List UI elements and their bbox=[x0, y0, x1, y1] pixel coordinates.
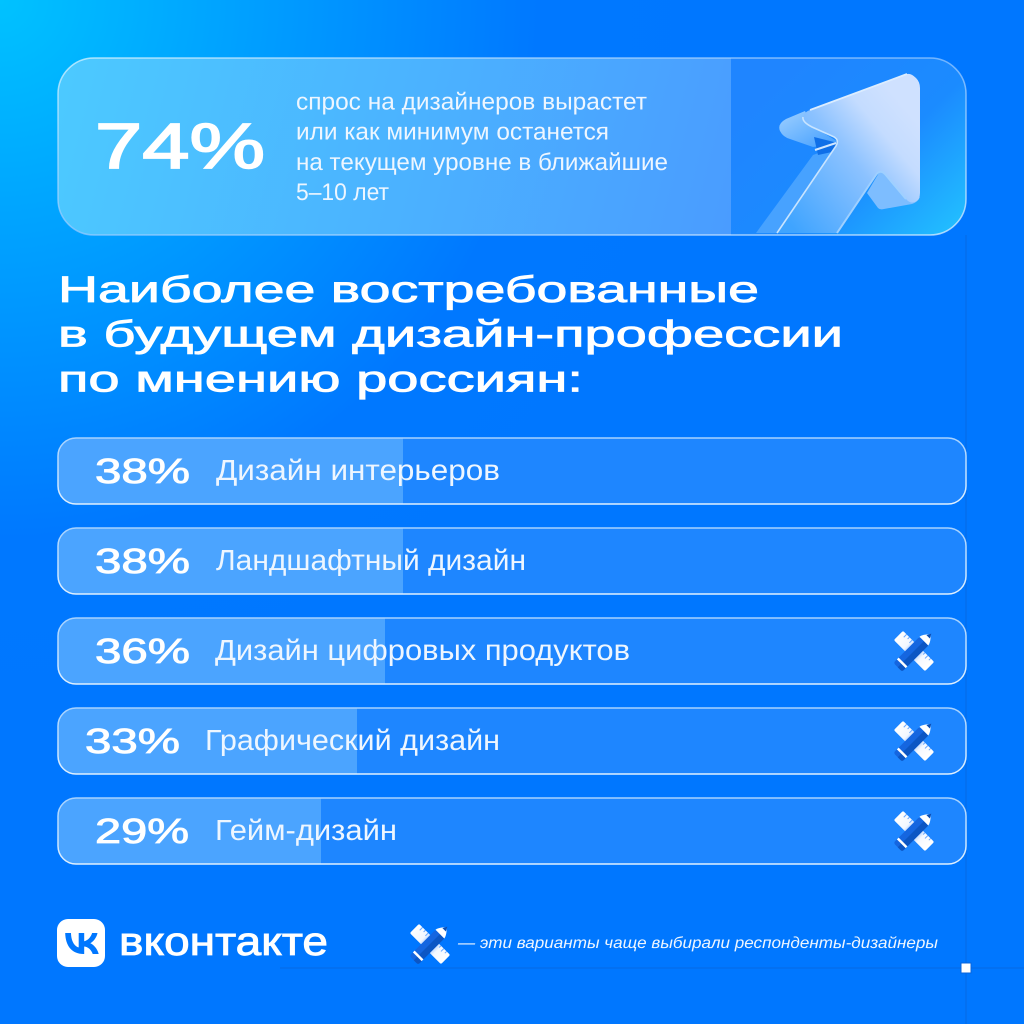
heading: по мнению россиян: bbox=[58, 358, 583, 400]
bar: game design 29%: Гейм-дизайн bbox=[215, 815, 397, 847]
icon: pencil and ruler bbox=[893, 719, 936, 762]
bar: digital products 36%: Дизайн цифровых продуктов bbox=[215, 635, 630, 667]
bar: graphic design 33%: Графический дизайн bbox=[205, 725, 500, 757]
big number: 74% bbox=[95, 110, 265, 182]
bar: graphic design 33% bbox=[58, 708, 966, 774]
heading bbox=[58, 269, 843, 400]
bar: game design 29%: 29% bbox=[95, 812, 189, 851]
bar: landscape 38% bbox=[58, 528, 966, 594]
bar: interiors 38%: 38% bbox=[95, 452, 190, 491]
bar: interiors 38% bbox=[58, 438, 966, 504]
description text: 5–10 лет bbox=[296, 179, 389, 206]
heading: в будущем дизайн-профессии bbox=[58, 314, 843, 354]
icon: pencil and ruler bbox=[893, 629, 936, 672]
logo: VK bbox=[57, 919, 105, 967]
bar: game design 29% bbox=[58, 798, 966, 864]
bar: digital products 36% bbox=[58, 618, 966, 684]
guide lines bbox=[280, 235, 1024, 1024]
icon: pencil and ruler bbox=[893, 809, 936, 852]
panel: demand statistic bbox=[58, 58, 966, 235]
bar: landscape 38%: Ландшафтный дизайн bbox=[216, 545, 526, 577]
heading: Наиболее востребованные bbox=[58, 269, 759, 310]
description text bbox=[296, 88, 668, 206]
bar: graphic design 33%: 33% bbox=[85, 722, 180, 761]
guide handle bbox=[961, 963, 971, 973]
bar: interiors 38%: Дизайн интерьеров bbox=[216, 455, 500, 487]
icon: pencil and ruler bbox=[409, 922, 452, 965]
wordmark: вконтакте bbox=[119, 920, 328, 964]
legend text: — эти варианты чаще выбирали респонденты-дизайнеры bbox=[457, 935, 938, 952]
description text: спрос на дизайнеров вырастет bbox=[296, 88, 647, 116]
description text: или как минимум останется bbox=[296, 118, 609, 146]
legend bbox=[409, 922, 938, 965]
icon: glass arrow bbox=[756, 74, 920, 233]
description text: на текущем уровне в ближайшие bbox=[296, 149, 668, 176]
bar: landscape 38%: 38% bbox=[95, 542, 190, 581]
bar: digital products 36%: 36% bbox=[95, 632, 190, 671]
